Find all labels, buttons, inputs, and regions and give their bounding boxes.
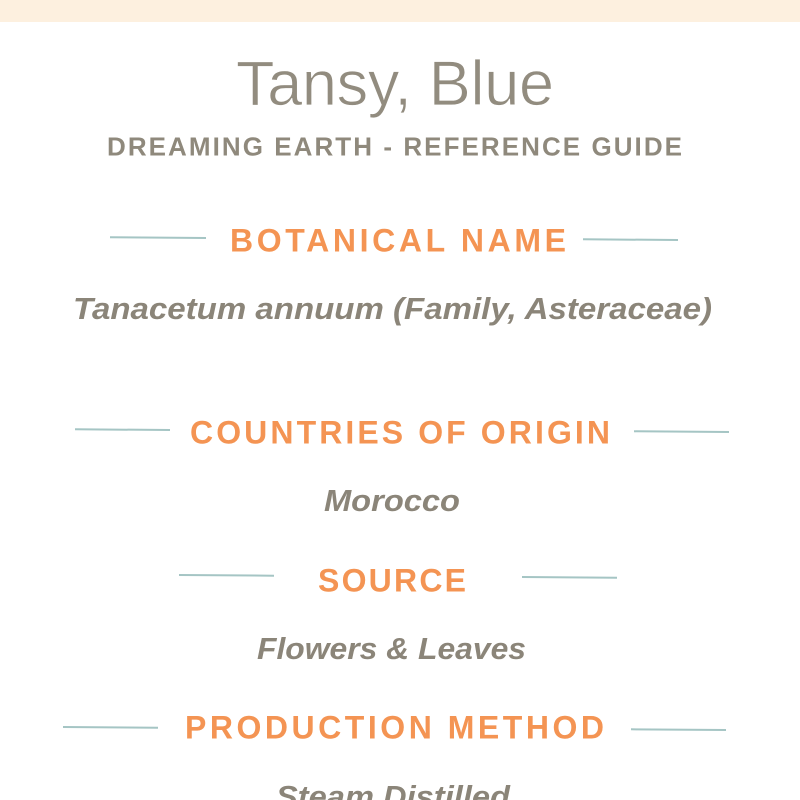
heading: botanical name: BOTANICAL NAME — [230, 222, 566, 258]
heading: countries of origin: COUNTRIES OF ORIGIN — [190, 414, 610, 450]
text: countries value: Morocco — [324, 483, 460, 518]
section: source — [179, 562, 617, 666]
subtitle: DREAMING EARTH - REFERENCE GUIDE — [107, 132, 682, 162]
title: Tansy, Blue — [236, 49, 554, 119]
text: source value: Flowers & Leaves — [257, 631, 526, 666]
top banner — [0, 0, 800, 22]
section: botanical name — [73, 222, 712, 326]
heading: source: SOURCE — [318, 562, 466, 598]
text: botanical name value: Tanacetum annuum (Family, Asteraceae) — [73, 291, 712, 326]
section: production method — [63, 710, 726, 800]
heading: production method: PRODUCTION METHOD — [185, 710, 604, 746]
section: countries of origin — [75, 414, 729, 518]
